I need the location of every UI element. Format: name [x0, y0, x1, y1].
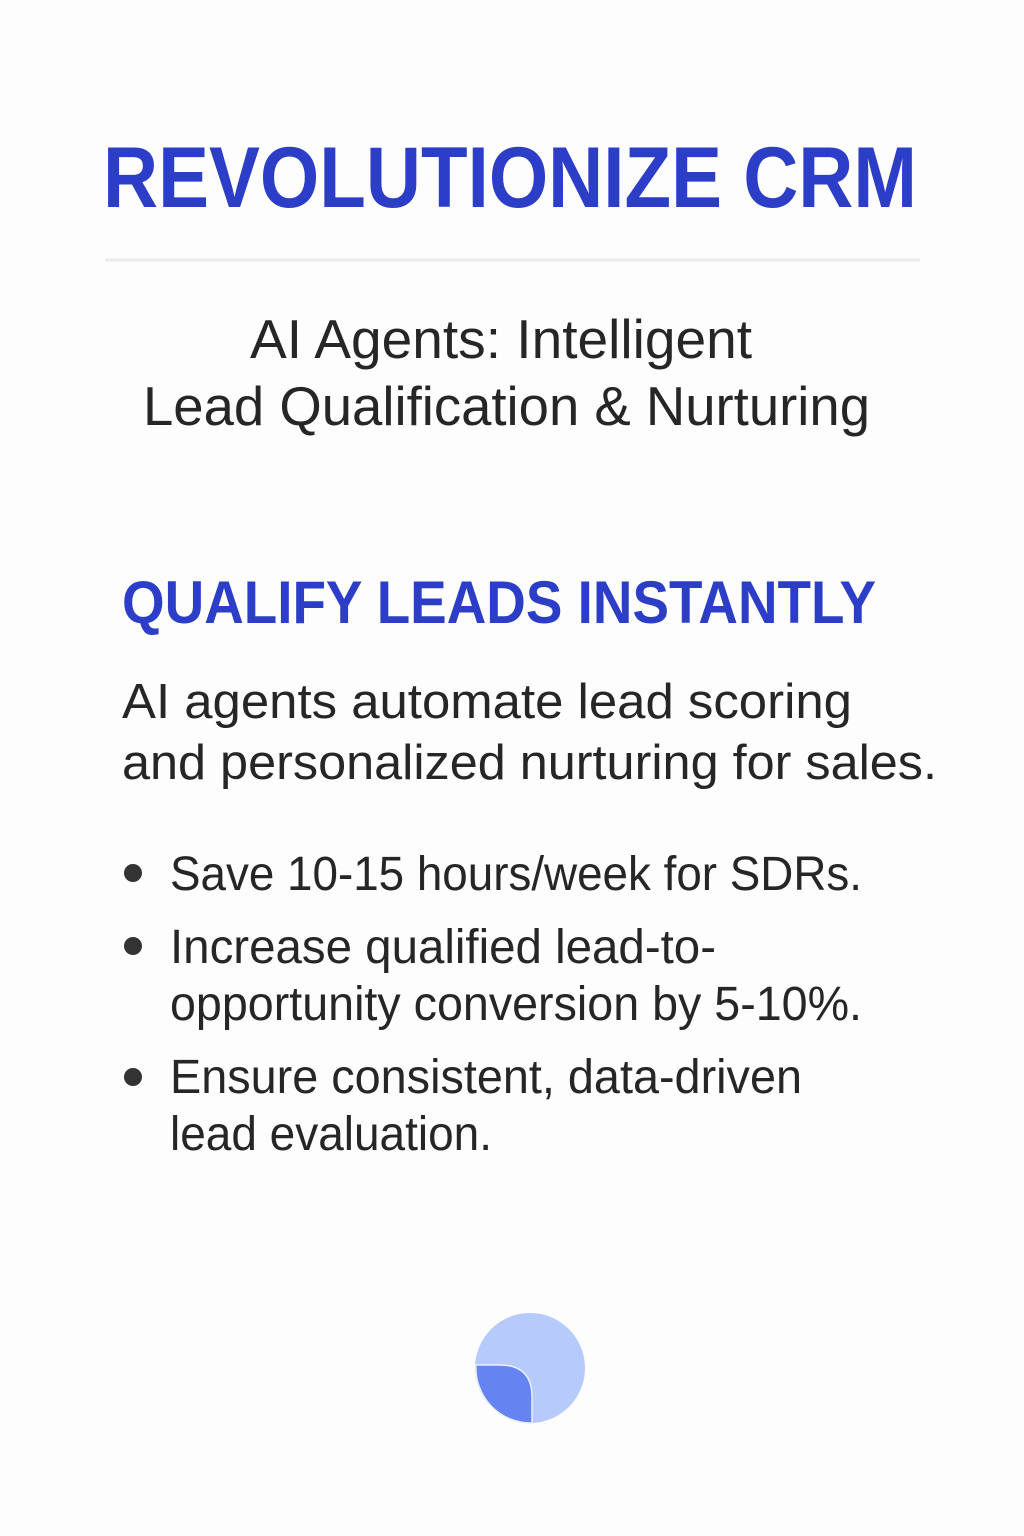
bullet list [124, 848, 862, 1161]
title: REVOLUTIONIZE CRM [103, 130, 917, 226]
bullet 2: opportunity conversion by 5-10%. [170, 978, 862, 1031]
icon: pie circle [475, 1313, 585, 1423]
bullet 2: Increase qualified lead-to- [170, 921, 716, 974]
bullet 3: lead evaluation. [170, 1108, 492, 1161]
bullet 2 [124, 921, 862, 1031]
bullet 1: Save 10-15 hours/week for SDRs. [170, 848, 862, 901]
bullet 3: Ensure consistent, data-driven [170, 1051, 802, 1104]
subtitle: AI Agents: Intelligent [250, 308, 752, 370]
body text [122, 675, 937, 790]
subtitle: Lead Qualification & Nurturing [143, 375, 870, 437]
subtitle [143, 308, 870, 437]
body text: and personalized nurturing for sales. [122, 736, 937, 790]
body text: AI agents automate lead scoring [122, 675, 852, 729]
bullet 3 [124, 1051, 802, 1161]
section heading: QUALIFY LEADS INSTANTLY [122, 569, 876, 636]
